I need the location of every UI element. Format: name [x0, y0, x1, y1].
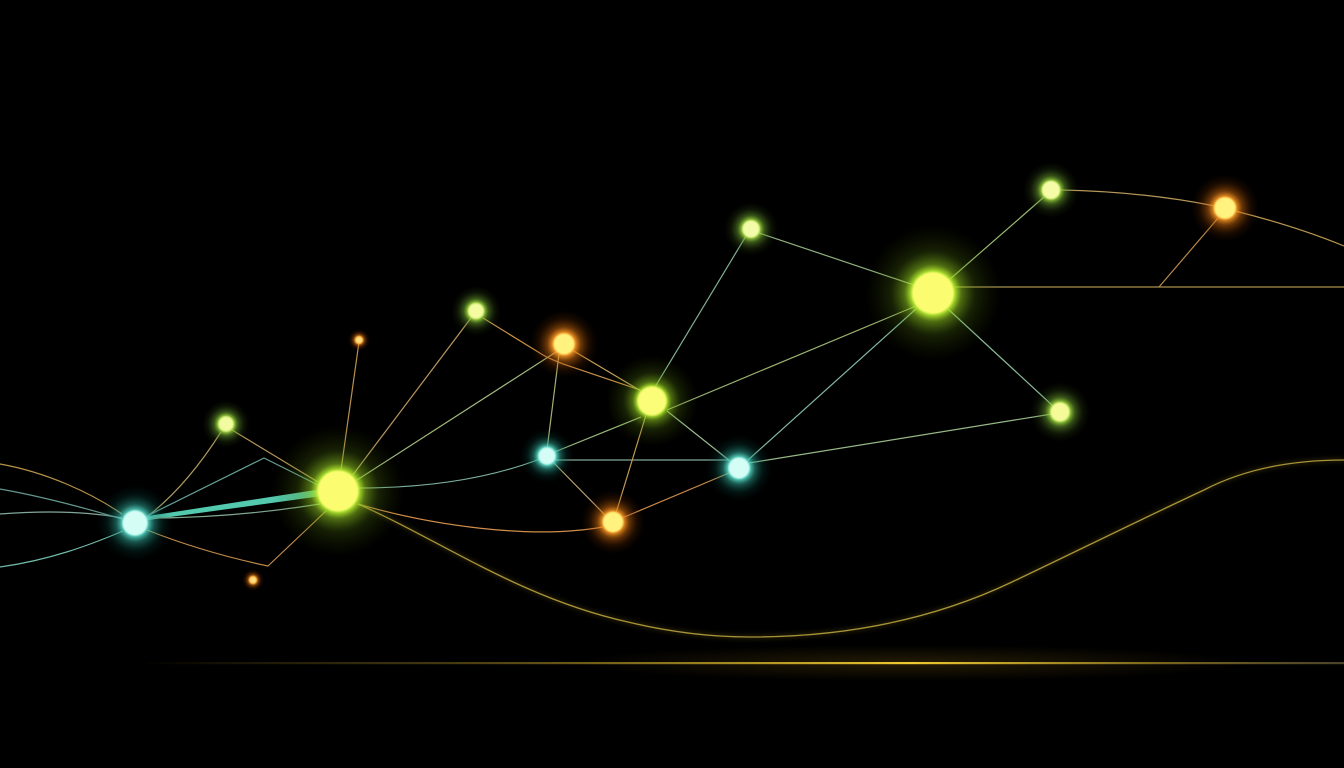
- baseline glow line: [140, 645, 1344, 681]
- node: yellow center: [606, 355, 698, 447]
- node: cyan center right: [706, 435, 772, 501]
- node: orange upper middle: [530, 310, 598, 378]
- thick teal link: [145, 489, 322, 520]
- edges: middle cluster: [483, 236, 1052, 518]
- node: green top center: [724, 202, 778, 256]
- node: small orange bottom: [242, 569, 264, 591]
- node: cyan left: [97, 485, 173, 561]
- node: green top right: [1023, 162, 1079, 218]
- edges: right cluster: [759, 190, 1344, 406]
- node: green top left: [202, 400, 250, 448]
- node: small orange top: [348, 329, 370, 351]
- node: orange lower: [581, 490, 645, 554]
- large wave curve: [358, 460, 1344, 637]
- node: large yellow left: [272, 425, 404, 557]
- node: green middle: [451, 286, 501, 336]
- edges: left cluster: [147, 318, 603, 566]
- left incoming curves: [0, 464, 123, 567]
- node: green lower right: [1030, 382, 1090, 442]
- node: orange far right: [1191, 174, 1259, 242]
- node: cyan center left: [520, 429, 574, 483]
- node: large yellow right: [865, 225, 1001, 361]
